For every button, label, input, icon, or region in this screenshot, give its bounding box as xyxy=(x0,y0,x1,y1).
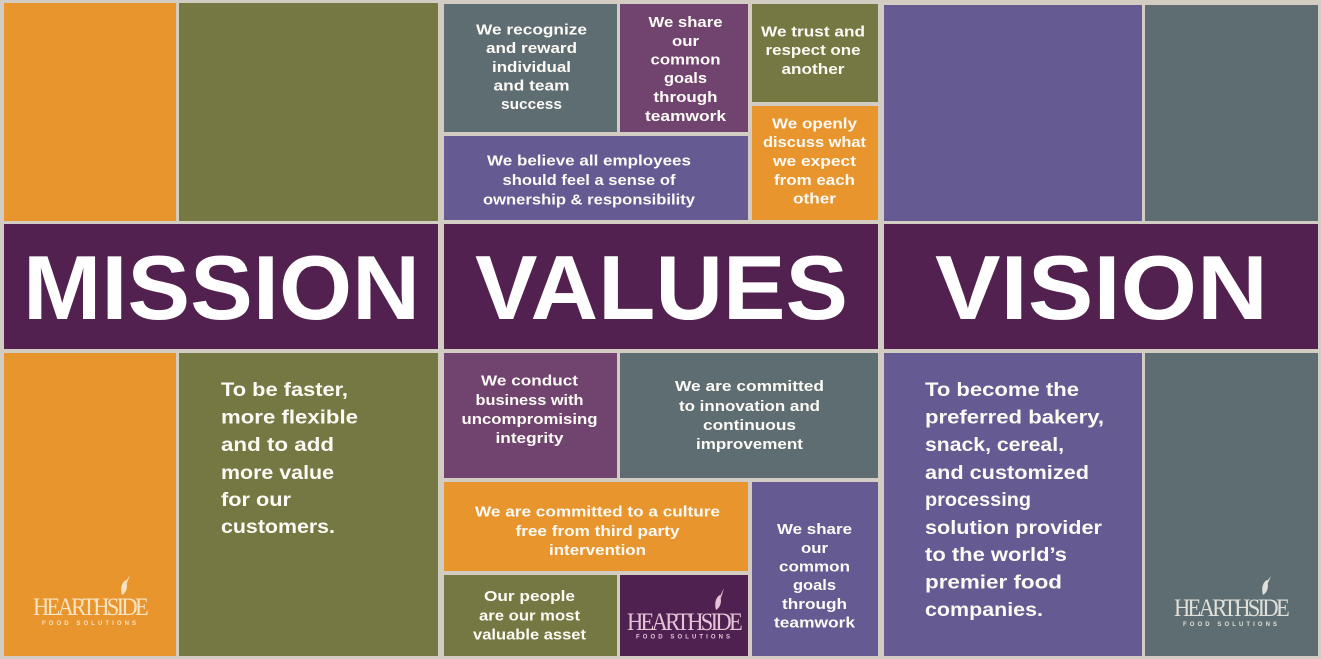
value: trust and respect: another xyxy=(782,61,845,78)
mission top orange block xyxy=(4,3,176,221)
value: culture: free from third party xyxy=(516,523,680,540)
value: openly discuss: we expect xyxy=(772,153,856,170)
value: integrity: integrity xyxy=(496,430,564,447)
value: integrity xyxy=(444,353,617,478)
value: innovation: We are committed xyxy=(675,378,824,395)
mission statement block: for our xyxy=(221,489,291,511)
vision statement block: processing xyxy=(925,489,1031,511)
value: integrity: We conduct xyxy=(481,372,578,390)
mission statement block: more value xyxy=(221,462,334,484)
vision statement block xyxy=(884,353,1142,656)
value: recognize and reward: success xyxy=(501,96,562,113)
value: culture: We are committed to a culture xyxy=(475,504,720,521)
value: openly discuss xyxy=(752,106,878,220)
logo block: center xyxy=(620,575,748,656)
logo: Hearthside: FOOD SOLUTIONS xyxy=(42,621,136,627)
logo block: center: FOOD SOLUTIONS xyxy=(636,634,730,640)
value: share common goals, lower: We share xyxy=(777,521,852,538)
value: our people: Our people xyxy=(484,588,575,605)
value: share common goals: We share xyxy=(648,14,722,31)
value: our people xyxy=(444,575,617,656)
value: share common goals: through xyxy=(654,89,718,106)
vision statement block: premier food xyxy=(925,572,1062,594)
mission statement block: and to add xyxy=(221,434,334,456)
vision statement block: and customized xyxy=(925,462,1089,484)
vision statement block: snack, cereal, xyxy=(925,434,1064,456)
value: share common goals, lower: our xyxy=(801,540,828,557)
vision statement block: to the world’s xyxy=(925,544,1067,566)
value: ownership xyxy=(444,136,748,220)
logo block: center: HEARTHSIDE xyxy=(627,609,742,636)
value: share common goals: our xyxy=(672,33,699,50)
value: share common goals, lower: goals xyxy=(793,577,836,594)
value: share common goals: teamwork xyxy=(645,108,727,125)
mission top olive block xyxy=(179,3,438,221)
value: innovation: continuous xyxy=(703,417,796,434)
value: our people: valuable asset xyxy=(473,626,586,644)
panel: vision column xyxy=(884,5,1318,656)
panel: values column xyxy=(444,4,878,656)
logo block: right: FOOD SOLUTIONS xyxy=(1183,622,1277,628)
value: share common goals, lower xyxy=(752,482,878,656)
values heading band xyxy=(444,224,878,349)
mission statement block: To be faster, xyxy=(221,379,348,401)
mission logo block xyxy=(4,353,176,656)
value: trust and respect: We trust and xyxy=(761,24,865,40)
value: ownership: ownership & responsibility xyxy=(483,192,696,208)
vision top purple block xyxy=(884,5,1142,221)
vision statement block: preferred bakery, xyxy=(925,407,1104,429)
vision heading band xyxy=(884,224,1318,349)
value: share common goals: common xyxy=(650,52,720,68)
value: recognize and reward xyxy=(444,4,617,132)
value: openly discuss: discuss what xyxy=(763,134,866,151)
value: recognize and reward: individual xyxy=(492,59,571,76)
value: openly discuss: other xyxy=(793,190,836,208)
vision top slate block xyxy=(1145,5,1318,221)
value: share common goals, lower: through xyxy=(782,596,847,613)
panel: mission column xyxy=(4,3,438,656)
values heading band: VALUES xyxy=(475,238,848,339)
value: trust and respect xyxy=(752,4,878,102)
logo block: right xyxy=(1145,353,1318,656)
value: share common goals, lower: common xyxy=(779,558,850,576)
value: openly discuss: We openly xyxy=(772,116,858,132)
value: share common goals: goals xyxy=(664,70,707,87)
mission heading band: MISSION xyxy=(23,238,420,339)
logo: Hearthside: HEARTHSIDE xyxy=(33,594,148,621)
value: innovation: improvement xyxy=(696,436,803,453)
vision statement block: solution provider xyxy=(925,517,1102,539)
value: recognize and reward: and team xyxy=(494,78,570,94)
value: innovation xyxy=(620,353,878,478)
value: share common goals xyxy=(620,4,748,132)
value: innovation: to innovation and xyxy=(679,398,820,415)
mission statement block xyxy=(179,353,438,656)
vision statement block: companies. xyxy=(925,599,1043,621)
value: integrity: business with xyxy=(476,392,584,409)
value: integrity: uncompromising xyxy=(462,411,598,428)
logo: Hearthside xyxy=(33,575,148,627)
logo block: right: HEARTHSIDE xyxy=(1174,595,1289,622)
value: culture: intervention xyxy=(549,542,646,559)
value: share common goals, lower: teamwork xyxy=(774,614,856,632)
value: our people: are our most xyxy=(479,608,580,624)
mission statement block: more flexible xyxy=(221,406,358,428)
vision statement block: To become the xyxy=(925,379,1079,401)
value: ownership: We believe all employees xyxy=(487,153,691,170)
value: openly discuss: from each xyxy=(774,172,855,189)
value: culture xyxy=(444,482,748,571)
value: recognize and reward: We recognize xyxy=(476,22,587,38)
mission statement block: customers. xyxy=(221,516,335,538)
vision heading band: VISION xyxy=(935,238,1268,339)
value: trust and respect: respect one xyxy=(766,42,860,59)
value: recognize and reward: and reward xyxy=(486,40,577,57)
value: ownership: should feel a sense of xyxy=(502,172,677,189)
